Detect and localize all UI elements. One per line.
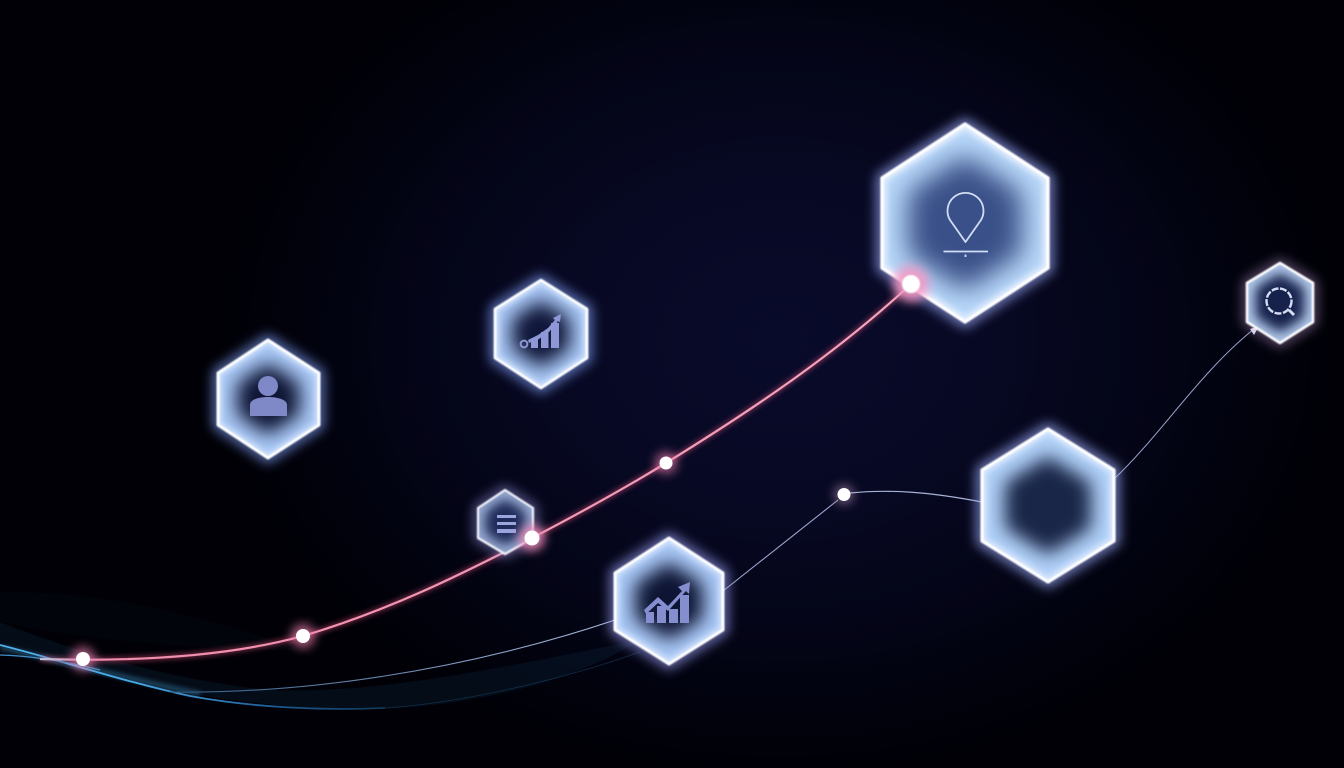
node 6: flare at large hexagon bbox=[893, 266, 929, 302]
pink path: main curve bbox=[40, 284, 911, 660]
hexagon: person bbox=[210, 335, 330, 465]
icon: person bbox=[250, 376, 287, 416]
node 1 bbox=[71, 647, 95, 671]
node 5 bbox=[834, 484, 854, 504]
hexagon: pin, large bbox=[875, 118, 1055, 328]
arrowhead bbox=[1250, 326, 1259, 335]
thin path: lower curve bbox=[170, 329, 1254, 692]
icon: list bbox=[497, 515, 516, 533]
icon: map pin with baseline bbox=[944, 193, 988, 257]
icon: magnifier bbox=[1266, 288, 1294, 315]
hexagon: magnifier bbox=[1243, 259, 1317, 347]
node 4 bbox=[655, 452, 677, 474]
icon: rising bar chart bbox=[521, 314, 561, 348]
pink path: main curve glow bbox=[40, 284, 911, 660]
hexagon: growth chart bbox=[610, 533, 728, 669]
node 2 bbox=[291, 624, 315, 648]
blue light ribbons bbox=[0, 592, 640, 709]
nodes on the curves bbox=[71, 266, 929, 671]
node 3 bbox=[519, 525, 545, 551]
hexagon: rising bars bbox=[490, 275, 595, 393]
hexagon: empty bbox=[975, 424, 1120, 588]
hexagon: list bbox=[474, 486, 538, 558]
icon: growth chart bbox=[644, 582, 690, 623]
